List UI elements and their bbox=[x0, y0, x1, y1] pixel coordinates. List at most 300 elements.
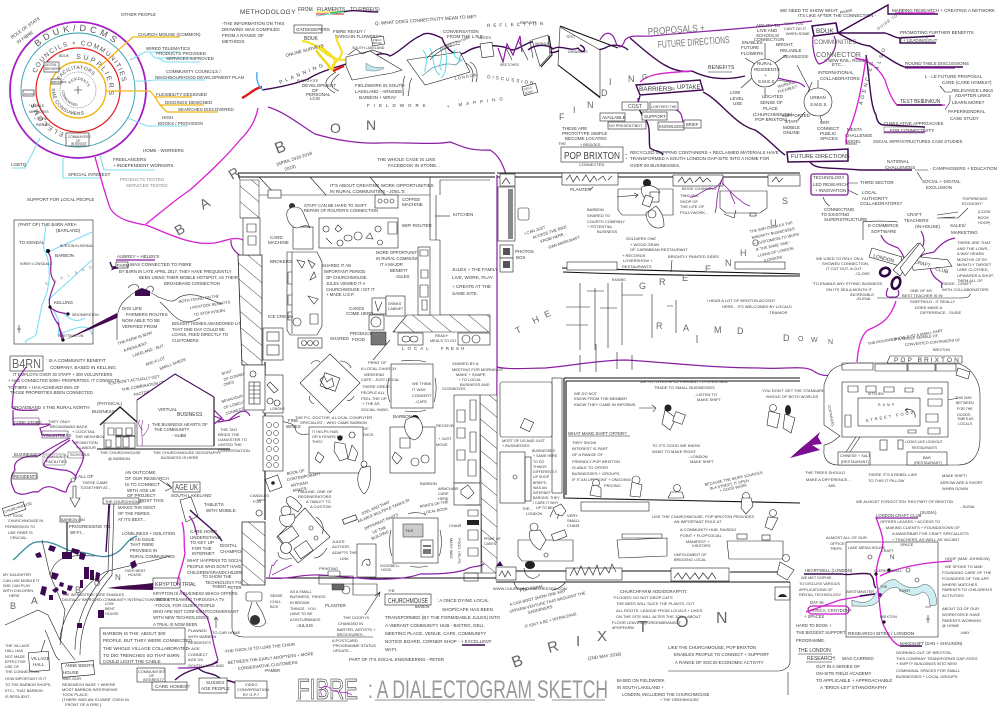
panel: Pop Brixton plan walls and furniture: BRIDGING LOCAL bbox=[674, 558, 706, 562]
B4RN description and barn drawing: THE NEIGHBOUR bbox=[75, 434, 108, 439]
panel: Pop Brixton plan walls and furniture: ON THE SITE WILL ALTER THE JOB + ABOUT bbox=[616, 614, 701, 619]
circle diagram annotations: FLEXIBILITY DESIGNED bbox=[156, 92, 208, 97]
Aubrey and Helen's farm hillside: AND A LOT bbox=[145, 355, 166, 367]
Pop Brixton site plan: TIMES AS bbox=[957, 417, 974, 421]
panel: Pop Brixton plan walls and furniture: THE... bbox=[522, 507, 533, 511]
fieldwork sketches and gatekeepers: BARGAIN FLOWERS? bbox=[335, 34, 382, 39]
Churchmouse furniture, counters and tables: SOCIAL HUBS. bbox=[361, 407, 389, 412]
Churchmouse furniture, counters and tables: KITCHEN bbox=[453, 212, 473, 217]
BDUK connector branches: L - LE FUTURE PROPOSAL bbox=[925, 74, 983, 79]
London map and research: OFFICE bbox=[830, 541, 845, 546]
London Craft Club scissors: (COOK bbox=[978, 210, 991, 214]
main title: FIBRE bbox=[297, 674, 358, 706]
panel: Pop Brixton plan walls and furniture: THINGS bbox=[533, 465, 547, 469]
London Craft Club scissors: -ELENA bbox=[856, 296, 871, 301]
Age UK: UNDERSTAND bbox=[190, 535, 222, 540]
London map and research: FOUNDING CARE OF THE bbox=[942, 570, 992, 575]
Churchmouse furniture, counters and tables: + MADE U.S.P. bbox=[326, 292, 354, 297]
Churchmouse furniture, counters and tables: LONGHS bbox=[270, 407, 285, 411]
panel: Barbon village map: HIGH BENT bbox=[125, 569, 146, 573]
London map and research: + TEACHERS, AS WELL AS VACANT bbox=[892, 537, 960, 542]
panel: Pop Brixton plan walls and furniture: THE BEES WILL SUCK THE PLANTS, CUT bbox=[616, 601, 695, 606]
Churchmouse furniture, counters and tables: THE bbox=[388, 589, 396, 593]
future directions: FUTURE DIRECTIONS bbox=[791, 154, 850, 160]
B4RN description and barn drawing: PROMOTION bbox=[73, 440, 98, 445]
B4RN description and barn drawing: ONES bbox=[223, 380, 235, 387]
barriers to uptake bbox=[600, 80, 703, 130]
Pop Brixton heading note: RECYCLED SHIPPING CONTAINERS + RECLAIMED MATERIALS HAVE bbox=[630, 150, 779, 155]
panel: Pop Brixton plan walls and furniture: FRIENDLY POP BRIXTON bbox=[572, 459, 620, 464]
circle diagram annotations: BOOKS / PROVISION bbox=[158, 121, 203, 126]
benefits hubs: rural and urban: WIFI bbox=[820, 120, 830, 125]
Churchmouse furniture, counters and tables: IN RURAL COMMUNITIES bbox=[376, 256, 427, 261]
panel: Pop Brixton plan walls and furniture: LONDON bbox=[526, 512, 543, 516]
fieldwork sketches and gatekeepers: ONLINE SURVEYS bbox=[285, 43, 324, 58]
Pop Brixton site plan: LOCALS bbox=[958, 422, 973, 426]
B4RN description and barn drawing: @ BARBON bbox=[108, 456, 130, 461]
Aubrey and Helen's farm hillside: LAKELAND - BUT bbox=[132, 343, 165, 358]
panel: Barbon village map: MY DAUGHTER bbox=[3, 573, 31, 577]
London map and research: WHERE MATCHES bbox=[942, 582, 978, 587]
Age UK: TO SHOW THE bbox=[202, 574, 232, 579]
London map and research: BUSINESSES + LOCAL GROUPS bbox=[896, 674, 958, 679]
London map and research: WE SPOKE TO MAE bbox=[945, 564, 983, 569]
Churchmouse furniture, counters and tables: CONTEMPORARY bbox=[286, 471, 321, 482]
Age UK: CARE HOME bbox=[190, 529, 217, 534]
Churchmouse furniture, counters and tables: GOODBOXES bbox=[442, 387, 466, 391]
BDUK connector branches: AGENCIES bbox=[858, 59, 876, 106]
Aubrey and Helen's farm hillside: BEEN USING THEIR MOBILE HOTSPOT, AS THEIR bbox=[139, 275, 238, 280]
pages and drawing stages along thread: SKETCHES bbox=[500, 63, 520, 67]
panel: Pop Brixton plan walls and furniture: POP FARM bbox=[519, 584, 543, 593]
fieldwork sketches and gatekeepers: PLANNING bbox=[279, 62, 327, 86]
B4RN description and barn drawing: IT EMPLOYS OVER 30 STAFF + 300 VOLUNTEERS bbox=[13, 372, 113, 377]
Pop Brixton site plan: FOR THE bbox=[957, 407, 973, 411]
big letters: the green ramp and brixton: I bbox=[576, 633, 580, 650]
barriers to uptake: SUPPORT bbox=[644, 114, 666, 119]
benefits hubs: rural and urban: LEVEL bbox=[730, 96, 745, 101]
Churchmouse furniture, counters and tables: -JULIUS bbox=[296, 623, 313, 628]
Pop Brixton heading note: BECOME LOCATED bbox=[565, 136, 607, 141]
Krypton trial note and care thread: + AGE bbox=[188, 646, 200, 651]
London map and research: RESEARCH bbox=[807, 656, 835, 662]
panel: Pop Brixton plan walls and furniture: A COMMUNITY HUB, RAISING bbox=[680, 527, 736, 532]
London Craft Club scissors: A WAY HEARD bbox=[957, 251, 984, 256]
London Craft Club scissors: WE USED TO RELY ON A bbox=[816, 256, 863, 261]
fieldwork sketches and gatekeepers: CONVERSATION bbox=[443, 29, 479, 34]
Churchmouse furniture, counters and tables: STAFF CAN BE HARD TO SHIFT bbox=[304, 203, 367, 208]
BDUK connector branches: WE NEED TO SHOW WHAT bbox=[780, 8, 838, 13]
B4RN description and barn drawing: THOSE PROPERTIES BEEN CONNECTED. bbox=[10, 390, 94, 395]
big letters: the green ramp and brixton: E bbox=[682, 273, 688, 283]
big letters: the green ramp and brixton: E bbox=[543, 308, 552, 320]
B4RN description and barn drawing: TO FIBRE + HAS ACHIEVED 65% OF bbox=[8, 385, 80, 390]
London Craft Club scissors: (IN-HOUSE) bbox=[915, 224, 940, 229]
letters FINDINGS bbox=[559, 74, 647, 122]
panel: Pop Brixton plan walls and furniture: - LONDON bbox=[688, 454, 708, 459]
Pop Brixton heading note bbox=[276, 126, 779, 172]
BDUK connector branches: PAPER/KENDRAL bbox=[948, 109, 986, 114]
Churchmouse furniture, counters and tables: BROCHURES - bbox=[337, 632, 366, 637]
BDUK connector branches: ROUND TABLE DISCUSSIONS bbox=[905, 61, 969, 66]
circle diagram annotations: OTHER PEOPLE bbox=[121, 12, 156, 17]
panel: Barbon village map: CAN USE MOBILE IT bbox=[3, 579, 40, 583]
proposals and future directions title: PROPOSALS + bbox=[647, 23, 705, 38]
Churchmouse furniture, counters and tables: FOOD bbox=[352, 337, 366, 342]
panel: Barbon village map: CRUCIAL. bbox=[10, 536, 28, 540]
Churchmouse furniture, counters and tables: HAVE TO BE bbox=[290, 612, 313, 616]
fieldwork basis note: BASED ON FIELDWORK bbox=[617, 678, 665, 683]
circular diagram: rings of stakeholders: BROKERS bbox=[52, 80, 67, 84]
circle diagram annotations: SERVICES TESTED bbox=[126, 183, 168, 188]
B4RN description and barn drawing: THE BUSINESS HEARTS OF bbox=[152, 422, 208, 427]
panel: Pop Brixton plan walls and furniture: TO IT'S GOOD WE KNOW bbox=[652, 443, 700, 448]
Pop Brixton heading note: CONNECTED bbox=[579, 162, 604, 167]
Aubrey and Helen's farm hillside: BY B4RN IN LATE APRIL 2017. THEY HAVE FREQUENTLY bbox=[119, 269, 232, 274]
panel: Barbon village map: TOOK PLACE. bbox=[62, 692, 89, 697]
large spaced letters BARBON: B bbox=[273, 138, 288, 158]
pages and drawing stages along thread: WORDS bbox=[535, 42, 549, 46]
BDUK connector branches: A NEW RAIL, ROMES bbox=[824, 58, 869, 63]
panel: B4RN map: BARBON bbox=[55, 253, 74, 258]
panel: Pop Brixton plan walls and furniture: DIFFERENTLY bbox=[533, 470, 558, 474]
Pop Brixton heading note: TRANSFORMED A SOUTH LONDON GAP-SITE INTO A HOME FOR bbox=[630, 156, 770, 161]
future directions: COLLABORATORS? bbox=[860, 201, 903, 206]
Aubrey and Helen's farm hillside: BROADBAND CONNECTION bbox=[164, 281, 220, 286]
Krypton trial note and care thread: INTEREST? bbox=[143, 678, 164, 682]
methodology heading and thread: METHODOLOGY : bbox=[240, 9, 300, 16]
benefits hubs: rural and urban: ONLINE bbox=[783, 130, 800, 135]
Churchmouse furniture, counters and tables: THE P.C. DOCTOR, A LOCAL COMPUTER bbox=[295, 415, 372, 420]
benefits hubs: rural and urban: SPACES bbox=[820, 136, 838, 141]
benefits hubs: rural and urban: FUTURE bbox=[741, 45, 759, 50]
pages and drawing stages along thread: DRAWINGS bbox=[568, 50, 588, 54]
Pop Brixton site plan: THERE IT'S A REBEL-LIKE bbox=[868, 472, 918, 477]
panel: Pop Brixton plan walls and furniture: CHURCHFARM ADDIOGRAFFITI: bbox=[620, 589, 687, 594]
panel: B4RN map: ENGLAND bbox=[45, 263, 97, 286]
Age UK: TRIAL bbox=[182, 582, 196, 588]
panel: Pop Brixton plan walls and furniture: -TRAINOR bbox=[768, 310, 787, 315]
panel: Pop Brixton plan walls and furniture: KNOW THEY CAME IN INFORMS bbox=[574, 402, 636, 407]
panel: Barbon village map: TO DIG TRENCHES SO THAT B4RN bbox=[103, 653, 179, 658]
BDUK connector branches: MESTA bbox=[847, 127, 862, 132]
Krypton trial note and care thread: SUSSEX bbox=[206, 680, 224, 685]
panel: Barbon village map: BARBON IS THE: ABOUT 300 bbox=[103, 631, 166, 636]
Aubrey and Helen's farm hillside: TO STOP INTERN bbox=[194, 309, 226, 317]
panel: Barbon village map: A bbox=[31, 596, 38, 607]
connector diagram of businesses and residents: SCHOOLS bbox=[70, 452, 90, 457]
big letters: the green ramp and brixton: H bbox=[740, 248, 746, 258]
panel: Pop Brixton plan walls and furniture: BECAUSE THE MORE SOURCES bbox=[704, 471, 763, 487]
panel: Barbon village map: (THERE WAS AN 'ELVARE' OVEN IN bbox=[62, 697, 129, 702]
London map and research: ACTIVITIES bbox=[942, 593, 964, 598]
B4RN description and barn drawing: BUSINESS bbox=[92, 409, 115, 414]
Churchmouse furniture, counters and tables: SPECIALIST - WHO CAME BARBON bbox=[300, 420, 367, 425]
panel: Barbon village map: THAT FIBRE bbox=[130, 542, 154, 547]
London map and research: PARENTS TO CHILDREN'S bbox=[942, 587, 992, 592]
London map and research: DAY IN bbox=[810, 600, 824, 605]
Churchmouse furniture, counters and tables: SHARED BY A bbox=[452, 361, 479, 366]
London map and research: APPLICATIONS OF bbox=[799, 588, 833, 592]
benefits hubs: rural and urban: INTERNATIONAL bbox=[818, 70, 854, 75]
panel: Pop Brixton plan walls and furniture: WHAT TO MAKE RIGHT bbox=[652, 449, 696, 454]
panel: Barbon village map: HOUSE bbox=[63, 670, 79, 675]
Churchmouse furniture, counters and tables: BOX bbox=[270, 604, 279, 609]
circular diagram: rings of stakeholders: TELECOMS bbox=[31, 104, 66, 138]
BDUK connector branches: CHALLENGE bbox=[845, 133, 872, 138]
Krypton trial note and care thread: CONVERSATION bbox=[237, 687, 269, 692]
Krypton trial note and care thread: AGE UK bbox=[188, 657, 203, 662]
London map and research: PROGRAMME. bbox=[796, 638, 825, 643]
Churchmouse furniture, counters and tables: MEETING FOR MORNINGS bbox=[452, 367, 503, 372]
circle diagram annotations: PRODUCTS PROVIDED bbox=[156, 51, 207, 56]
London Craft Club scissors: SHEFFIELD - IT REALLY bbox=[910, 299, 956, 304]
Pop Brixton heading note: (APRIL 2016-2018 bbox=[276, 151, 313, 167]
Churchmouse furniture, counters and tables: JULES + THE FAMILY bbox=[452, 267, 498, 272]
BDUK connector branches: CARE (CARE HOMES?) bbox=[942, 80, 992, 85]
Churchmouse furniture, counters and tables: CHAIR bbox=[449, 523, 462, 528]
Pop Brixton site plan: THIS WAY bbox=[955, 396, 973, 400]
B4RN description and barn drawing: BUILT bbox=[221, 369, 233, 376]
Churchmouse furniture, counters and tables: LIVE, WORK, PLAY bbox=[452, 275, 493, 280]
fieldwork sketches and gatekeepers: DEVELOPMENT bbox=[302, 83, 336, 88]
Churchmouse furniture, counters and tables: MACHINE bbox=[268, 240, 289, 245]
panel: Barbon village map: THE CONNECTION bbox=[5, 670, 39, 674]
circle diagram annotations: FREELANCERS bbox=[113, 157, 146, 162]
London map and research: TRIPS bbox=[830, 546, 842, 551]
panel: Pop Brixton plan walls and furniture: RAISING bbox=[612, 278, 626, 282]
Age UK bbox=[125, 470, 247, 590]
B4RN description and barn drawing: BROADBAND 4 THE RURAL NORTH bbox=[12, 405, 90, 410]
Churchmouse furniture, counters and tables: SHOP/CAFE HAS BEEN bbox=[442, 607, 493, 612]
Krypton trial note and care thread: WITH BARBON bbox=[188, 634, 216, 639]
circular diagram: rings of stakeholders: BDUK/DCMS bbox=[34, 24, 117, 46]
Age UK: DIGITAL bbox=[220, 543, 238, 548]
benefits hubs: rural and urban: "WHY YOU bbox=[784, 22, 804, 26]
panel: Barbon village map: HOUSE bbox=[128, 573, 142, 577]
circle diagram annotations: LGBTQ bbox=[11, 162, 27, 167]
large spaced letters BARBON: B bbox=[172, 220, 188, 239]
fieldwork sketches and gatekeepers bbox=[279, 21, 546, 109]
big letters: the green ramp and brixton: H bbox=[531, 314, 541, 326]
big letters: the green ramp and brixton: A bbox=[683, 323, 689, 333]
future directions: + INNOVATION bbox=[815, 188, 846, 193]
methodology heading and thread: FILAMENTS bbox=[317, 7, 346, 13]
benefits hubs: rural and urban: SCHOOLS/ bbox=[756, 33, 780, 38]
London map and research: ABOUT 2/3 OF OUR bbox=[942, 606, 979, 611]
panel: Pop Brixton plan walls and furniture: HERE... ITS WELCOMED BY LOCALS bbox=[722, 304, 792, 309]
barriers to uptake: UPTAKE bbox=[677, 85, 701, 91]
Pop Brixton site plan: BAR bbox=[923, 456, 931, 460]
benefits hubs: rural and urban: STAFF bbox=[785, 119, 799, 124]
methodology heading and thread: TO FIBRE(S) bbox=[350, 7, 380, 13]
panel: Pop Brixton plan walls and furniture: OF CARIBBEAN RESTAURANT bbox=[630, 247, 688, 252]
fieldwork sketches and gatekeepers: BOOK bbox=[373, 41, 382, 45]
benefits hubs: rural and urban: USE bbox=[733, 101, 742, 106]
Churchmouse furniture, counters and tables: CAKES bbox=[349, 306, 364, 311]
big letters: the green ramp and brixton: S bbox=[782, 196, 788, 206]
Churchmouse furniture, counters and tables: BARBON bbox=[415, 605, 430, 609]
London map and research: HEARTWELL (LONDON) bbox=[805, 568, 853, 573]
Churchmouse furniture, counters and tables: REGENERATORS bbox=[298, 494, 332, 499]
benefits hubs: rural and urban: + bbox=[764, 73, 767, 78]
panel: Pop Brixton plan walls and furniture: + CUSTOMERS TO WORK bbox=[753, 232, 800, 246]
Age UK: OF PROJECT bbox=[127, 493, 156, 498]
benefits hubs: rural and urban: POP BRIXTON) bbox=[755, 117, 788, 122]
panel: Pop Brixton plan walls and furniture: OF A RANGE OF bbox=[572, 452, 603, 457]
Churchmouse furniture, counters and tables: CAFE - JUST LOCAL bbox=[361, 377, 400, 382]
Churchmouse furniture, counters and tables: OR 5 HOURS FLY bbox=[312, 435, 344, 439]
London Craft Club scissors: MONTHS OF BY bbox=[957, 257, 988, 262]
future directions: THIRD SECTOR bbox=[860, 180, 894, 185]
Pop Brixton site plan: THE TREES SHOULD bbox=[805, 470, 845, 475]
benefits hubs: rural and urban: RURAL bbox=[757, 61, 773, 66]
fieldwork sketches and gatekeepers: LONDON bbox=[454, 72, 478, 81]
London Craft Club scissors: CRAFT bbox=[913, 259, 931, 269]
panel: Pop Brixton plan walls and furniture: + SAME HERE bbox=[533, 454, 558, 458]
Churchmouse furniture, counters and tables: AN ABLE MULTIPLE TANKS IN bbox=[356, 497, 410, 524]
London Craft Club scissors: ON ITS SEA A MONTH IT bbox=[826, 287, 873, 292]
connector threads: main route of the fibre bbox=[95, 21, 896, 570]
letters FINDINGS: N bbox=[628, 74, 634, 84]
Krypton trial note and care thread: WITH NEW TECHNOLOGIES. bbox=[153, 615, 210, 620]
pages and drawing stages along thread bbox=[478, 20, 618, 98]
connector diagram of businesses and residents bbox=[11, 438, 111, 507]
London Craft Club scissors: CLUB bbox=[934, 266, 950, 276]
London map and research: THE bbox=[880, 585, 888, 589]
Churchmouse furniture, counters and tables: + CREATE AT THE bbox=[452, 284, 491, 289]
B4RN description and barn drawing: BROADBAND BACK bbox=[50, 424, 88, 429]
panel: Barbon village map: PEOPLE. BUT THEY WERE CONNECTED. bbox=[103, 638, 193, 643]
Age UK: WITH AGE UK bbox=[127, 488, 156, 493]
Krypton trial note and care thread: COMMUNITIES bbox=[138, 670, 165, 674]
Churchmouse furniture, counters and tables: CHILL bbox=[270, 599, 282, 604]
panel: Pop Brixton plan walls and furniture: ALL ROOTS. LEAGUE FROM LOCALS + LIKES bbox=[616, 608, 703, 613]
panel: Pop Brixton plan walls and furniture: INTEREST IS PART bbox=[572, 446, 609, 451]
B4RN description and barn drawing: B4RN bbox=[12, 356, 41, 371]
letters FINDINGS: F bbox=[559, 112, 565, 122]
London map and research: @ HOME bbox=[942, 623, 960, 628]
big letters: the green ramp and brixton: R bbox=[659, 277, 666, 287]
Aubrey and Helen's farm hillside: AUBREY + HELEN'S bbox=[117, 254, 159, 259]
circular diagram: rings of stakeholders: INTEREST bbox=[71, 142, 87, 146]
circular diagram: rings of stakeholders: OF bbox=[76, 139, 80, 143]
panel: Pop Brixton plan walls and furniture: ENABLES PEOPLE TO CONNECT + SUPPORT bbox=[674, 652, 770, 657]
B4RN description and barn drawing: UNITED THE bbox=[218, 442, 242, 447]
panel: Pop Brixton plan walls and furniture: + GOOD WORK bbox=[719, 483, 748, 493]
Pop Brixton heading note: PROTOTYPE SIMPLE bbox=[562, 131, 607, 136]
Age UK: FOR THE bbox=[192, 546, 212, 551]
circle diagram annotations: SEARCHES DISCOVERED bbox=[178, 107, 235, 112]
Pop Brixton site plan: CHINESE + SALT bbox=[840, 454, 871, 458]
barriers to uptake: BARRIERS bbox=[639, 86, 672, 93]
big letters: the green ramp and brixton: U bbox=[770, 218, 776, 228]
Churchmouse furniture, counters and tables: OF THE bbox=[371, 524, 387, 535]
circular diagram: rings of stakeholders: FACILITATORS bbox=[57, 66, 95, 79]
future directions: TO EXISTING bbox=[821, 212, 850, 217]
Pop Brixton heading note: POP BRIXTON bbox=[564, 151, 620, 162]
Churchmouse furniture, counters and tables: COME HERE bbox=[346, 311, 373, 316]
Krypton trial note and care thread: AGE PEOPLE bbox=[201, 686, 230, 691]
big letters: the green ramp and brixton: M bbox=[714, 325, 722, 335]
Churchmouse furniture, counters and tables: TILE bbox=[405, 528, 414, 533]
big letters: the green ramp and brixton: R bbox=[656, 321, 663, 331]
Churchmouse furniture, counters and tables: PLANTER bbox=[325, 603, 347, 608]
Churchmouse furniture, counters and tables: A POSTCARD bbox=[332, 638, 358, 643]
Churchmouse furniture, counters and tables: PRINTS OF THE bbox=[419, 500, 449, 509]
Krypton trial note and care thread: BETWEEN THE EARLY ADOPTERS + MORE bbox=[228, 651, 314, 665]
circle diagram annotations: NEIGHBOURHOOD DEVELOPMENT PLAN bbox=[155, 75, 244, 80]
proposals and future directions title bbox=[647, 23, 730, 51]
Churchmouse furniture, counters and tables: FINE bbox=[288, 418, 298, 423]
fieldwork sketches and gatekeepers: GATEKEEPERS bbox=[296, 27, 330, 32]
Churchmouse furniture, counters and tables: REPAIR OF ROUTER'S CONNECTION bbox=[304, 208, 378, 213]
BDUK connector branches: ALSO bbox=[874, 45, 889, 71]
panel: B4RN map: (PART OF) THE B4RN AREA bbox=[18, 222, 77, 227]
panel: Pop Brixton plan walls and furniture: UP TO BE bbox=[536, 506, 553, 510]
BDUK connector branches: ITS LIKE AFTER THE CONNECTION - bbox=[798, 13, 877, 18]
fieldwork basis note: + THE GREENHOUSE bbox=[660, 698, 699, 702]
methodology heading and thread bbox=[222, 7, 477, 44]
London map and research: N bbox=[890, 555, 894, 561]
B4RN description and barn drawing: (PHYSICAL) bbox=[97, 401, 123, 406]
panel: Pop Brixton plan walls and furniture: + RECORDS bbox=[622, 253, 646, 258]
London Craft Club scissors: BOOK bbox=[978, 216, 989, 220]
Churchmouse furniture, counters and tables: RECEIVER bbox=[436, 423, 457, 428]
Churchmouse furniture, counters and tables: THE DOOR IS bbox=[343, 615, 369, 620]
Aubrey and Helen's farm hillside bbox=[65, 254, 249, 371]
benefits hubs: rural and urban: RESIDENTS bbox=[754, 67, 780, 72]
Aubrey and Helen's farm hillside: LIVESTOCK BENEFITS bbox=[190, 300, 231, 310]
panel: Pop Brixton plan walls and furniture: POLLYWORK... bbox=[680, 210, 708, 215]
BDUK connector branches: FOR CONNECTIVITY bbox=[890, 128, 934, 133]
Pop Brixton site plan: KITCHEN bbox=[868, 392, 884, 396]
circle diagram annotations: SPECIAL INTEREST bbox=[68, 172, 111, 177]
panel: Barbon village map: CHURCHMOUSE bbox=[4, 501, 33, 514]
Krypton trial note and care thread: WHO ARE NOT CONFIDENT/CONVERSANT bbox=[153, 609, 239, 614]
London map and research: MAKESHIFT (DAN + SHAUNON) bbox=[900, 641, 963, 646]
Age UK: TECHNOLOGY FOR bbox=[205, 580, 244, 585]
benefits hubs: rural and urban: PLACE bbox=[763, 106, 778, 111]
Age UK: PEOPLE WHO DON'T HAVE bbox=[187, 564, 241, 569]
letters FINDINGS: I bbox=[573, 105, 576, 115]
London Craft Club scissors: "EXPERIENCE bbox=[962, 197, 988, 201]
Age UK: THEM? bbox=[212, 584, 227, 589]
letters FINDINGS: G bbox=[642, 74, 647, 81]
panel: Pop Brixton plan walls and furniture: MINORITY BUSINESSES bbox=[751, 227, 796, 240]
panel: Barbon village map: - PROGRESSING ITS bbox=[66, 524, 111, 529]
Age UK: IS TO CONNECT bbox=[125, 482, 160, 487]
London map and research: -MAY bbox=[960, 630, 970, 635]
London map and research: ON-SITE FIELD ACADEMY bbox=[816, 671, 872, 676]
Churchmouse furniture, counters and tables: FOOD, HELPS bbox=[457, 538, 461, 564]
Pop Brixton site plan bbox=[790, 356, 983, 509]
panel: Pop Brixton plan walls and furniture: BUSINESSES + GROUPS bbox=[572, 471, 620, 476]
Pop Brixton heading note: THE WHOLE CAGE IS LIKE bbox=[377, 157, 435, 162]
Churchmouse furniture, counters and tables: FOR bbox=[253, 499, 262, 504]
panel: Barbon village map: AT ITS BEST... bbox=[118, 517, 146, 522]
benefits hubs: rural and urban: RELIABLE bbox=[780, 48, 802, 53]
BDUK connector branches: ADAPTER LINKS bbox=[955, 93, 991, 98]
Krypton trial note and care thread: CARE HOMES? bbox=[155, 684, 190, 690]
Churchmouse furniture, counters and tables: MORE OPPORTUNITIES bbox=[376, 250, 424, 255]
Churchmouse furniture, counters and tables bbox=[243, 183, 567, 662]
panel: Pop Brixton plan walls and furniture: KNOW FROM THE MEMBER bbox=[574, 396, 627, 401]
Krypton trial note and care thread: SOUTH LAKELAND bbox=[188, 663, 224, 668]
Krypton trial note and care thread: -PAMBR bbox=[264, 668, 280, 673]
Pop Brixton heading note: : bbox=[625, 151, 628, 161]
BDUK connector branches: BDUK bbox=[816, 28, 834, 35]
